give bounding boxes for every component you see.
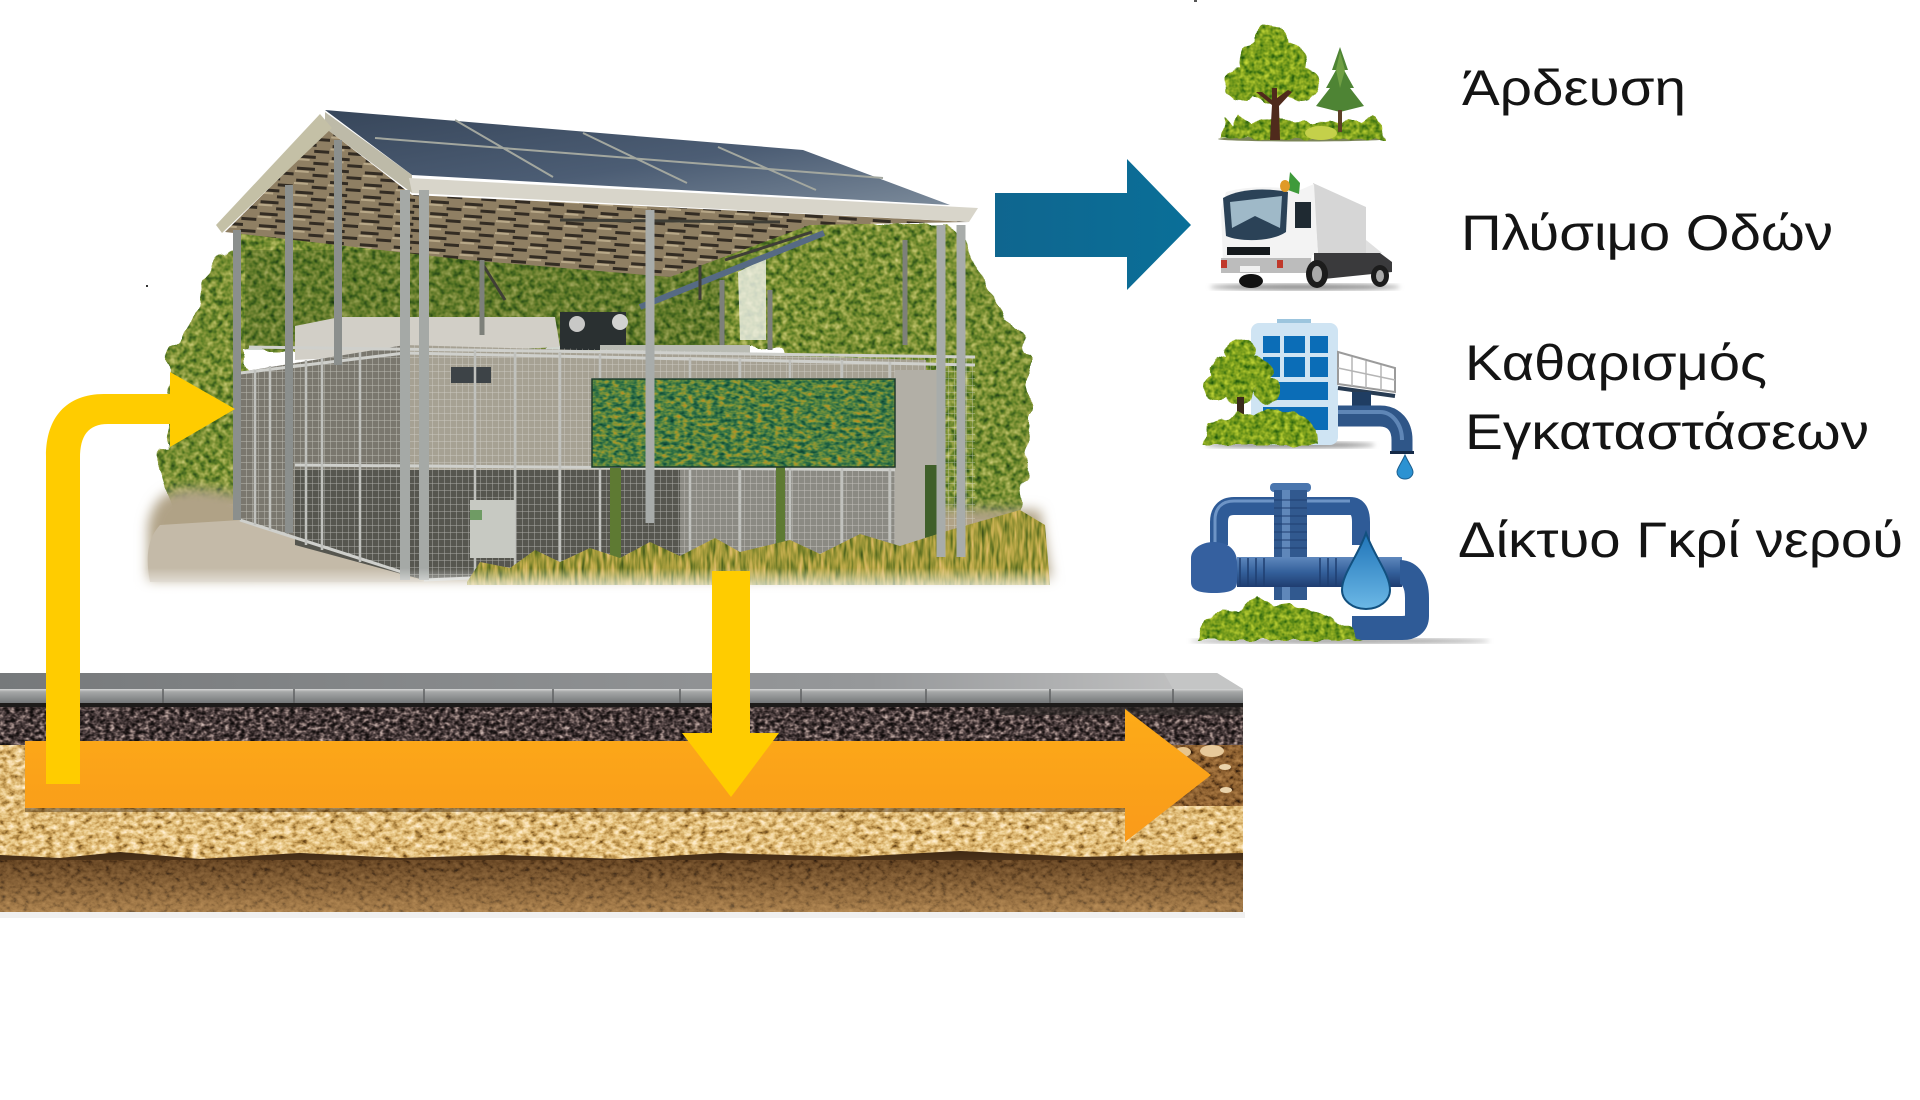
soil layer <box>0 851 1243 912</box>
green living wall <box>592 379 895 467</box>
icon: grey water pipe network <box>1190 483 1490 644</box>
arrow: yellow outflow down to the network <box>682 571 779 797</box>
sand and pebble layer <box>0 806 1243 862</box>
steel posts <box>237 140 961 580</box>
small speck <box>146 285 148 287</box>
stones left of arrow <box>0 745 25 810</box>
text: facility cleaning: Καθαρισμός <box>1465 335 1767 391</box>
text: road washing: Πλύσιμο Οδών <box>1461 205 1833 261</box>
text: facility cleaning: Εγκαταστάσεων <box>1465 404 1869 460</box>
main process tank and mesh fence <box>240 345 975 580</box>
stones right of arrow <box>1175 745 1232 793</box>
pavement kerb <box>0 673 1243 715</box>
bottom white fade <box>120 568 1070 596</box>
text: grey water network: Δίκτυο Γκρί νερού <box>1458 512 1903 568</box>
solar roof <box>325 110 950 205</box>
equipment and climbing plants under the wall <box>470 465 938 573</box>
icon: trees for irrigation <box>1218 25 1386 142</box>
roof underside and structure <box>216 112 978 307</box>
ground pad <box>148 488 1052 584</box>
arrow: underground orange flow <box>25 709 1211 842</box>
arrow: blue outflow to uses <box>995 159 1191 290</box>
panel: treatment plant building <box>120 110 1070 596</box>
arrow: yellow inflow to the plant <box>46 372 235 784</box>
dark gravel layer <box>0 703 1243 753</box>
mid soil layer behind arrow <box>0 745 1243 815</box>
shadow under ground <box>0 912 1245 918</box>
text: facility cleaning <box>1465 335 1869 460</box>
icon: road washing truck <box>1210 172 1400 290</box>
icon: facility with tap <box>1203 319 1414 479</box>
small speck <box>1194 0 1197 2</box>
grass foreground <box>467 510 1050 585</box>
tank on roof deck <box>295 312 750 360</box>
trees behind the plant <box>160 222 1030 525</box>
text: irrigation: Άρδευση <box>1462 60 1686 116</box>
panel: ground cross-section layers <box>0 673 1245 918</box>
